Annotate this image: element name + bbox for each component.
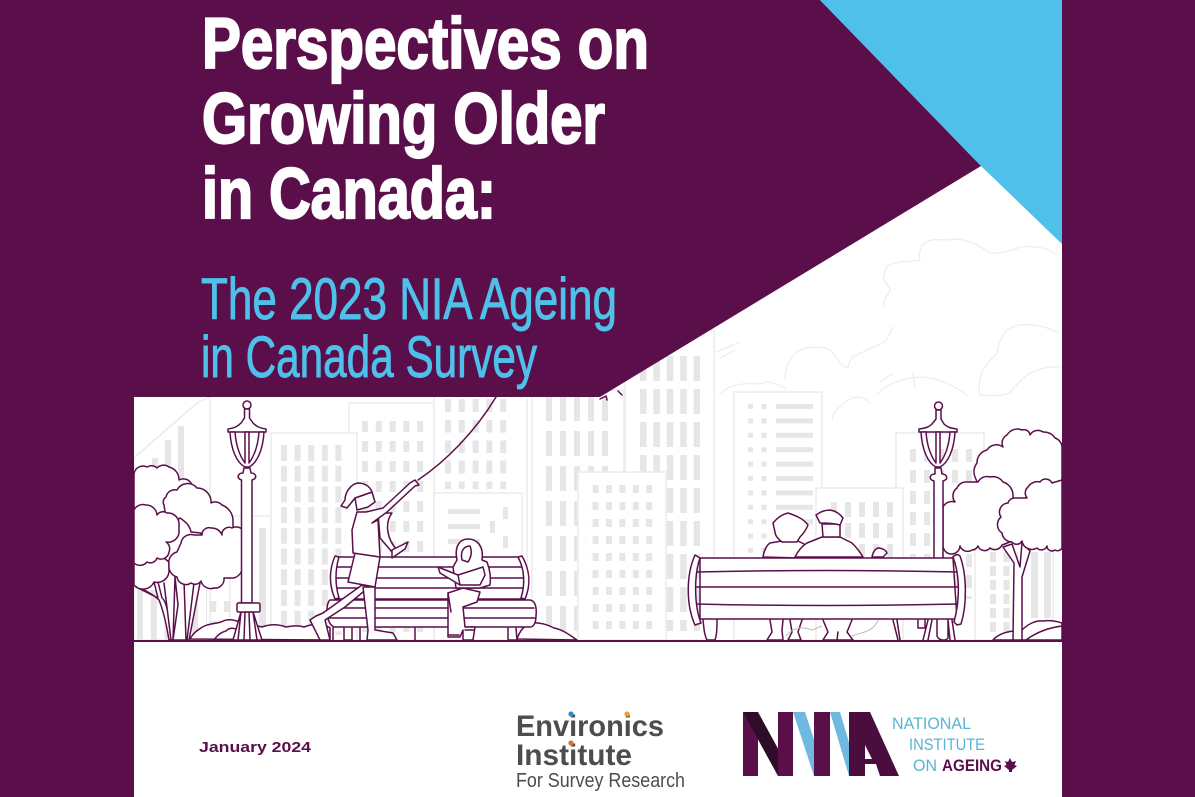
illustration: seniors behind bench: [763, 510, 887, 640]
title: [202, 5, 649, 234]
subtitle: [201, 267, 617, 390]
illustration: woman reading on bench: [438, 539, 490, 640]
kite string: [418, 397, 496, 480]
illustration: left bench: [327, 556, 536, 640]
logo: NIA mark: [743, 712, 899, 776]
right purple margin: [1062, 0, 1195, 797]
subtitle: The 2023 NIA Ageing: [201, 267, 617, 332]
logo: Environics Institute: Environics: [516, 710, 664, 743]
title: Perspectives on: [202, 5, 649, 84]
illustration: left lamp post: [228, 401, 266, 640]
title: in Canada:: [202, 155, 496, 234]
subtitle: in Canada Survey: [201, 325, 537, 390]
logo: National Institute on Ageing wordmark: INSTITUTE: [909, 735, 985, 754]
logo: Environics Institute: Institute: [516, 739, 632, 772]
illustration: right lamp post: [918, 402, 957, 640]
ground line: [134, 640, 1062, 642]
page background: white cover sheet: [134, 0, 1062, 797]
blue corner triangle: [820, 0, 1062, 244]
illustration: left tree: [134, 465, 243, 640]
illustration: city skyline buildings: [134, 330, 1053, 640]
illustration: low bushes: [190, 620, 1062, 640]
logo: National Institute on Ageing wordmark: NATIONAL: [892, 714, 971, 733]
title: Growing Older: [202, 80, 605, 159]
illustration: right tree: [943, 429, 1062, 640]
logo: Environics Institute: [516, 710, 685, 792]
date: January 2024: [199, 739, 312, 756]
logo: Environics Institute: For Survey Research: [516, 770, 685, 792]
logo: National Institute on Ageing wordmark: AGEING: [942, 756, 1002, 775]
illustration: clouds: [716, 239, 1062, 420]
kite tip at banner edge: [600, 391, 622, 400]
logo: National Institute on Ageing wordmark: ON: [913, 756, 937, 775]
logo: National Institute on Ageing wordmark: [892, 714, 1017, 775]
illustration: boy flying kite: [310, 480, 419, 640]
illustration: right bench: [688, 555, 965, 640]
